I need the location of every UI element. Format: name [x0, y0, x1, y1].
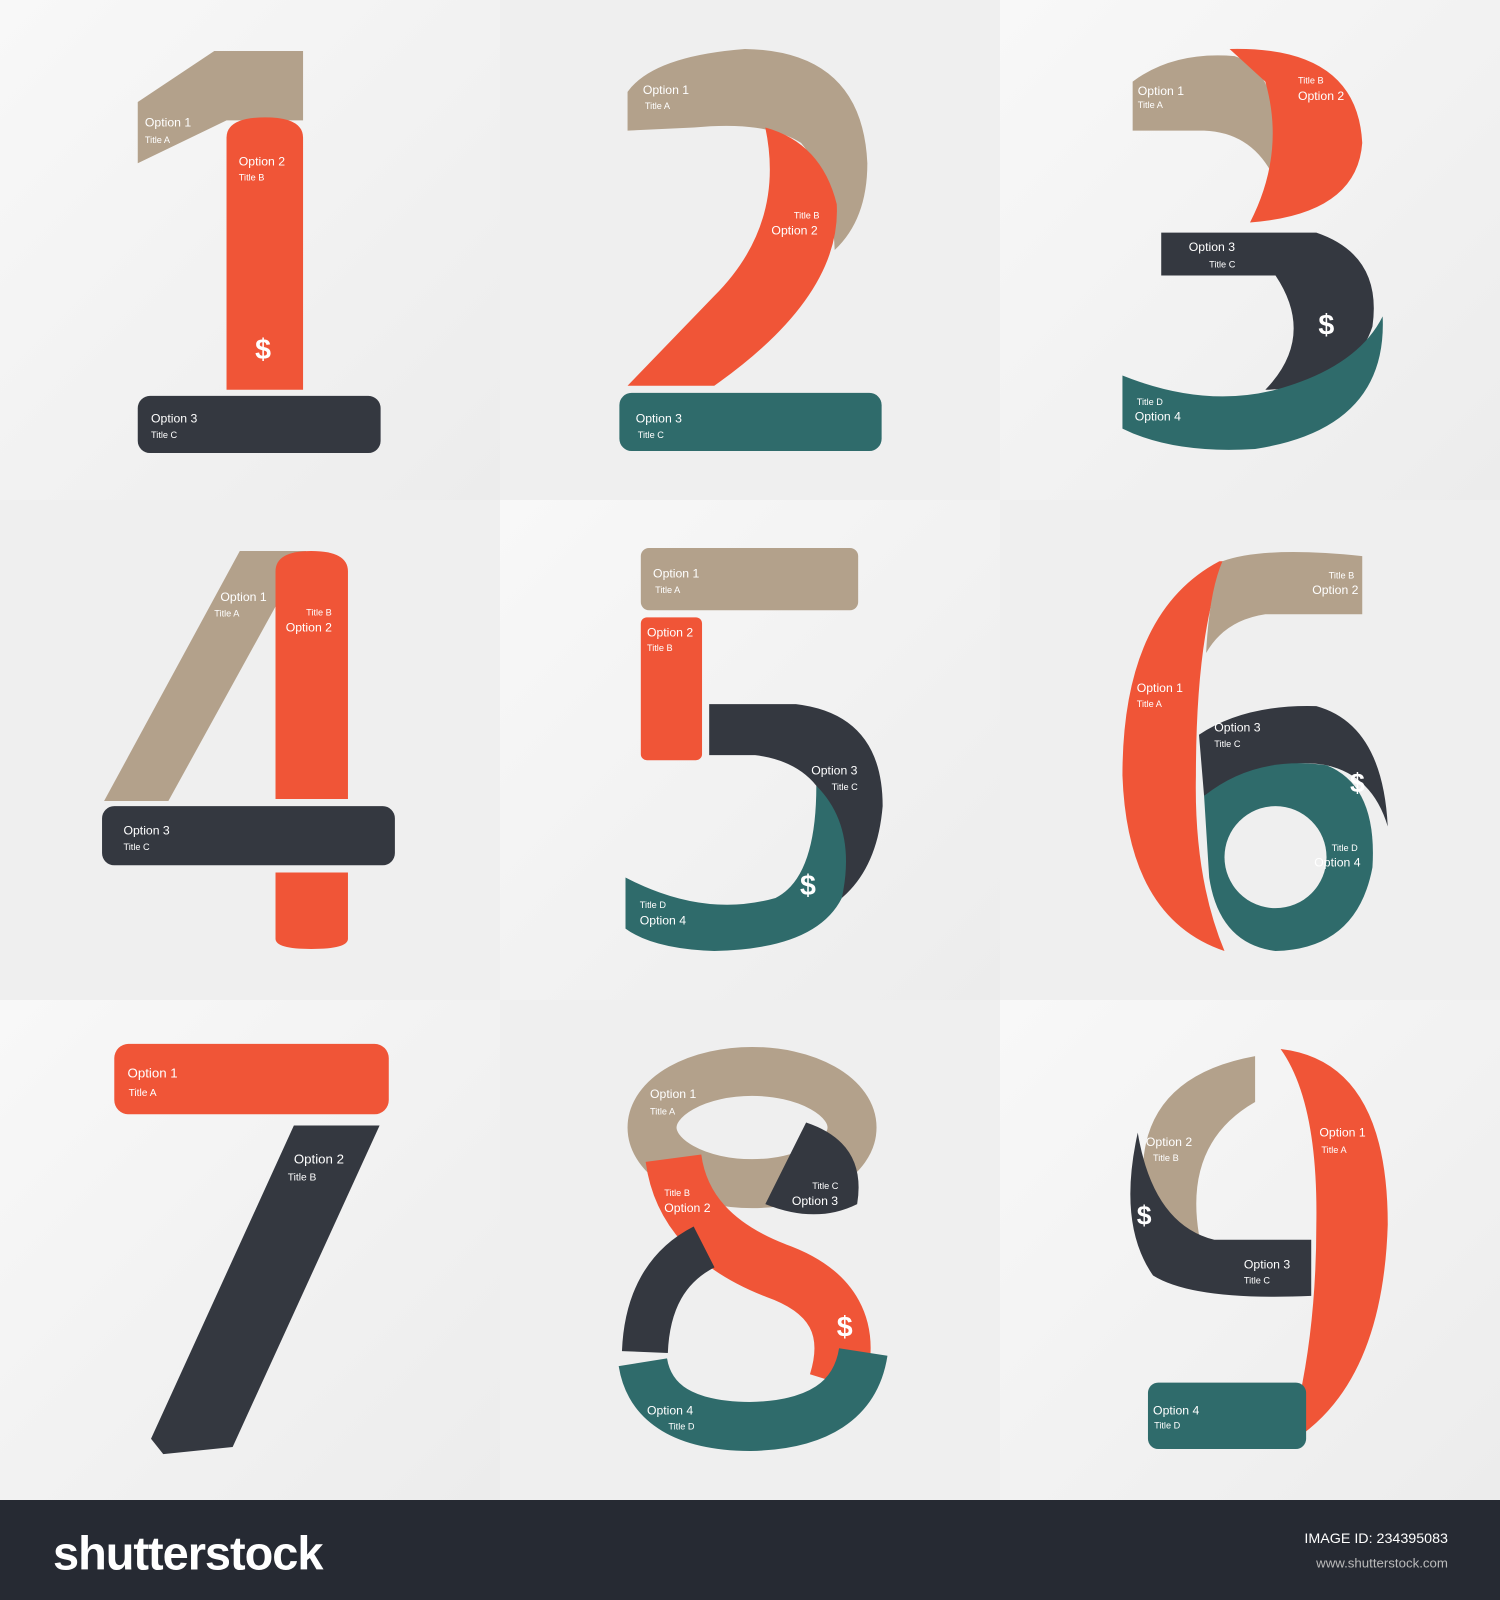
digit 4: Option 3	[123, 824, 170, 838]
digit 2: Title B	[794, 210, 820, 220]
digit 8: Option 4	[647, 1403, 693, 1417]
digit 2: Title A	[645, 101, 671, 111]
digit 3: Option 4	[1135, 409, 1181, 423]
digit 3: Option 3	[1189, 240, 1235, 254]
digit 9: Option 2	[1146, 1135, 1192, 1149]
digit 3: Option 1	[1138, 84, 1184, 98]
digit 5: Title A	[655, 585, 681, 595]
digit 6: Title D	[1332, 843, 1358, 853]
digit 5: Option 4	[640, 913, 686, 927]
digit 1: Option 3	[151, 411, 197, 425]
digit 2: Option 3	[636, 411, 682, 425]
digit 9	[1130, 1049, 1388, 1449]
digit 3: Title B	[1298, 76, 1324, 86]
digit 2: Title C	[638, 430, 664, 440]
digit 6: Option 1	[1137, 681, 1183, 695]
digit 7: Title A	[129, 1088, 157, 1099]
digit 4: Title A	[214, 608, 240, 618]
digit 1: Title A	[145, 135, 171, 145]
digit 8: $	[837, 1312, 853, 1344]
digit 9: Option 4	[1153, 1403, 1200, 1417]
digit 9: $	[1137, 1200, 1152, 1230]
digit 8: Option 2	[664, 1201, 711, 1215]
digit 2: Option 2	[771, 224, 818, 238]
digit 7: Option 2	[294, 1151, 344, 1166]
website: www.shutterstock.com	[1315, 1555, 1448, 1570]
digit 8: Option 3	[792, 1194, 838, 1208]
digit 9: Title C	[1244, 1276, 1270, 1286]
digit 5: Option 1	[653, 567, 700, 581]
digit 4: Title C	[123, 842, 150, 852]
digit 6: Title A	[1137, 699, 1163, 709]
digit 3: Option 2	[1298, 89, 1344, 103]
digit 7: Title B	[288, 1173, 316, 1184]
digit 5: Option 3	[811, 763, 858, 777]
digit 9: Title D	[1154, 1421, 1181, 1431]
digit 3	[1122, 49, 1383, 450]
digit 6: Title C	[1214, 739, 1241, 749]
digit 5: $	[800, 870, 816, 902]
digit 1: Option 2	[239, 154, 285, 168]
digit 4: Option 1	[220, 590, 267, 604]
shutterstock logo: shutterstock	[53, 1527, 324, 1579]
digit 3: Title C	[1209, 259, 1236, 269]
digit 6: Option 4	[1314, 855, 1361, 869]
digit 5: Option 2	[647, 626, 693, 640]
digit 9: Option 1	[1319, 1126, 1366, 1140]
digit 5: Title C	[832, 782, 858, 792]
digit 6	[1122, 552, 1388, 951]
digit 6: Option 3	[1214, 721, 1261, 735]
digit 3: Title D	[1137, 397, 1163, 407]
digit 1	[138, 51, 381, 453]
digit 6: Option 2	[1312, 583, 1359, 597]
digit 3: Title A	[1138, 100, 1164, 110]
digit 9: Title B	[1153, 1153, 1179, 1163]
digit 5: Title B	[647, 643, 673, 653]
digit 4: Title B	[306, 607, 332, 617]
digit 9: Option 3	[1244, 1257, 1290, 1271]
digit 8: Title A	[650, 1106, 676, 1116]
digit 6: $	[1350, 768, 1365, 798]
digit 7: Option 1	[128, 1066, 178, 1081]
image id: IMAGE ID: 234395083	[1304, 1531, 1448, 1547]
digit 2	[619, 49, 882, 451]
digit 8	[643, 1071, 863, 1432]
digit 7	[114, 1044, 389, 1454]
digit 5	[626, 548, 883, 951]
digit 8: Title C	[812, 1181, 839, 1191]
digit 4: Option 2	[286, 621, 332, 635]
digit 1: $	[255, 334, 271, 366]
digit 5: Title D	[640, 900, 666, 910]
digit 1: Title B	[239, 173, 264, 183]
digit 4	[102, 551, 395, 949]
digit 2: Option 1	[643, 83, 689, 97]
footer bar	[0, 1500, 1500, 1600]
digit 9: Title A	[1321, 1145, 1347, 1155]
digit 1: Option 1	[145, 116, 191, 130]
digit 8: Option 1	[650, 1087, 696, 1101]
digit 8: Title D	[668, 1422, 695, 1432]
digit 1: Title C	[151, 430, 178, 440]
digit 6: Title B	[1329, 571, 1354, 581]
digit 3: $	[1318, 310, 1334, 342]
digit 8: Title B	[664, 1188, 690, 1198]
